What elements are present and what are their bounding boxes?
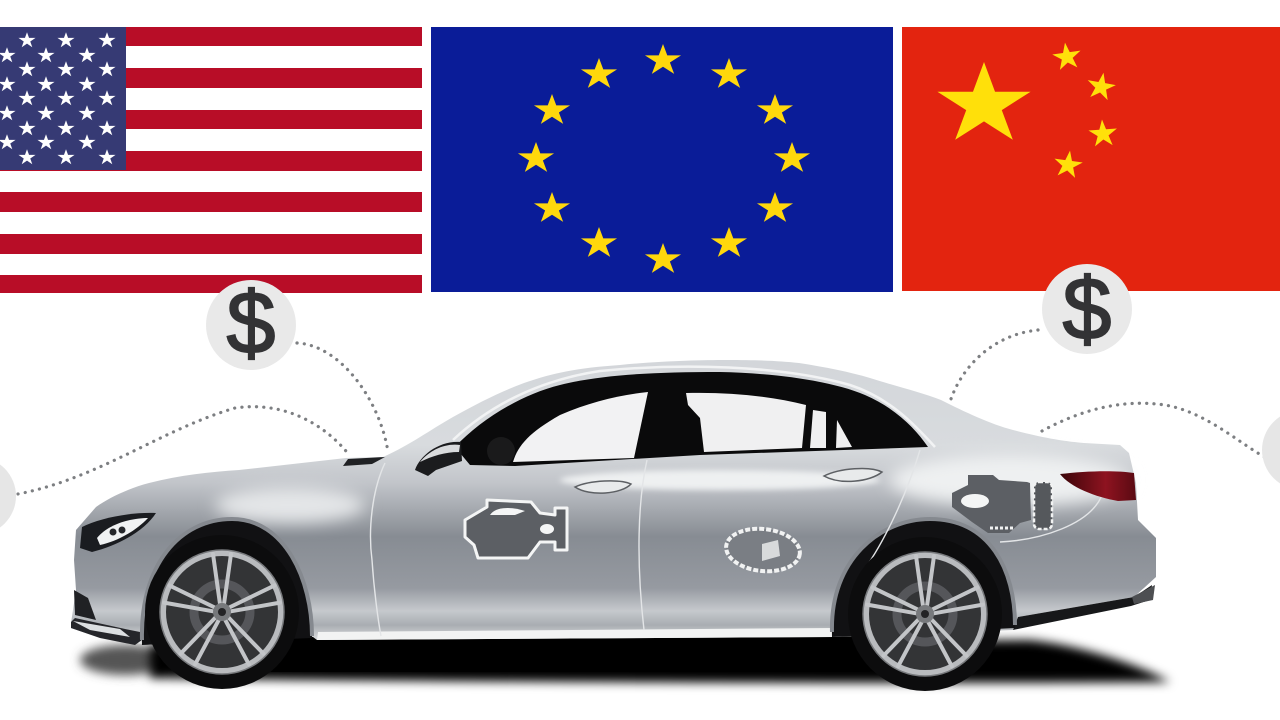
door seams xyxy=(371,450,1102,636)
dotted connector lines xyxy=(18,330,1266,494)
door highlight xyxy=(560,470,880,490)
dollar badge: left xyxy=(206,273,296,372)
sill highlight xyxy=(317,628,834,640)
rear window glass xyxy=(686,393,806,452)
headlight xyxy=(80,513,156,552)
front window glass xyxy=(513,392,648,462)
wiper xyxy=(343,457,385,466)
exhaust detail xyxy=(1132,585,1155,604)
door handle: rear xyxy=(824,469,882,481)
icon: oil can xyxy=(952,475,1052,533)
tail light xyxy=(1060,471,1136,501)
window frame xyxy=(455,372,928,466)
wheel: front xyxy=(145,535,299,689)
door handle: front xyxy=(575,481,631,493)
front headrest xyxy=(487,437,515,465)
car shadow xyxy=(80,636,1170,683)
front lip xyxy=(71,618,150,645)
dollar badge: right xyxy=(1042,259,1132,358)
dollar badge: left: $ xyxy=(227,273,275,372)
grille xyxy=(74,590,96,620)
dollar badge: right: $ xyxy=(1063,259,1111,358)
icon: chain oval xyxy=(724,525,802,575)
mirror xyxy=(415,442,462,476)
rear body highlight xyxy=(890,454,1130,506)
icon: engine xyxy=(465,500,567,558)
car xyxy=(71,360,1156,691)
roof rail highlight xyxy=(453,367,935,447)
rear skirt xyxy=(1013,585,1152,630)
wheel arch: front xyxy=(142,519,312,645)
car body xyxy=(71,360,1156,645)
wheel: rear xyxy=(848,537,1002,691)
front fender highlight xyxy=(215,487,365,523)
flag: European Union xyxy=(431,27,893,292)
wheel arch: rear xyxy=(832,519,1015,637)
rear small windows xyxy=(810,410,826,448)
flag: United States xyxy=(0,27,422,293)
flag: China xyxy=(902,27,1280,291)
edge badge: left xyxy=(0,457,16,535)
edge badge: right xyxy=(1262,410,1280,490)
